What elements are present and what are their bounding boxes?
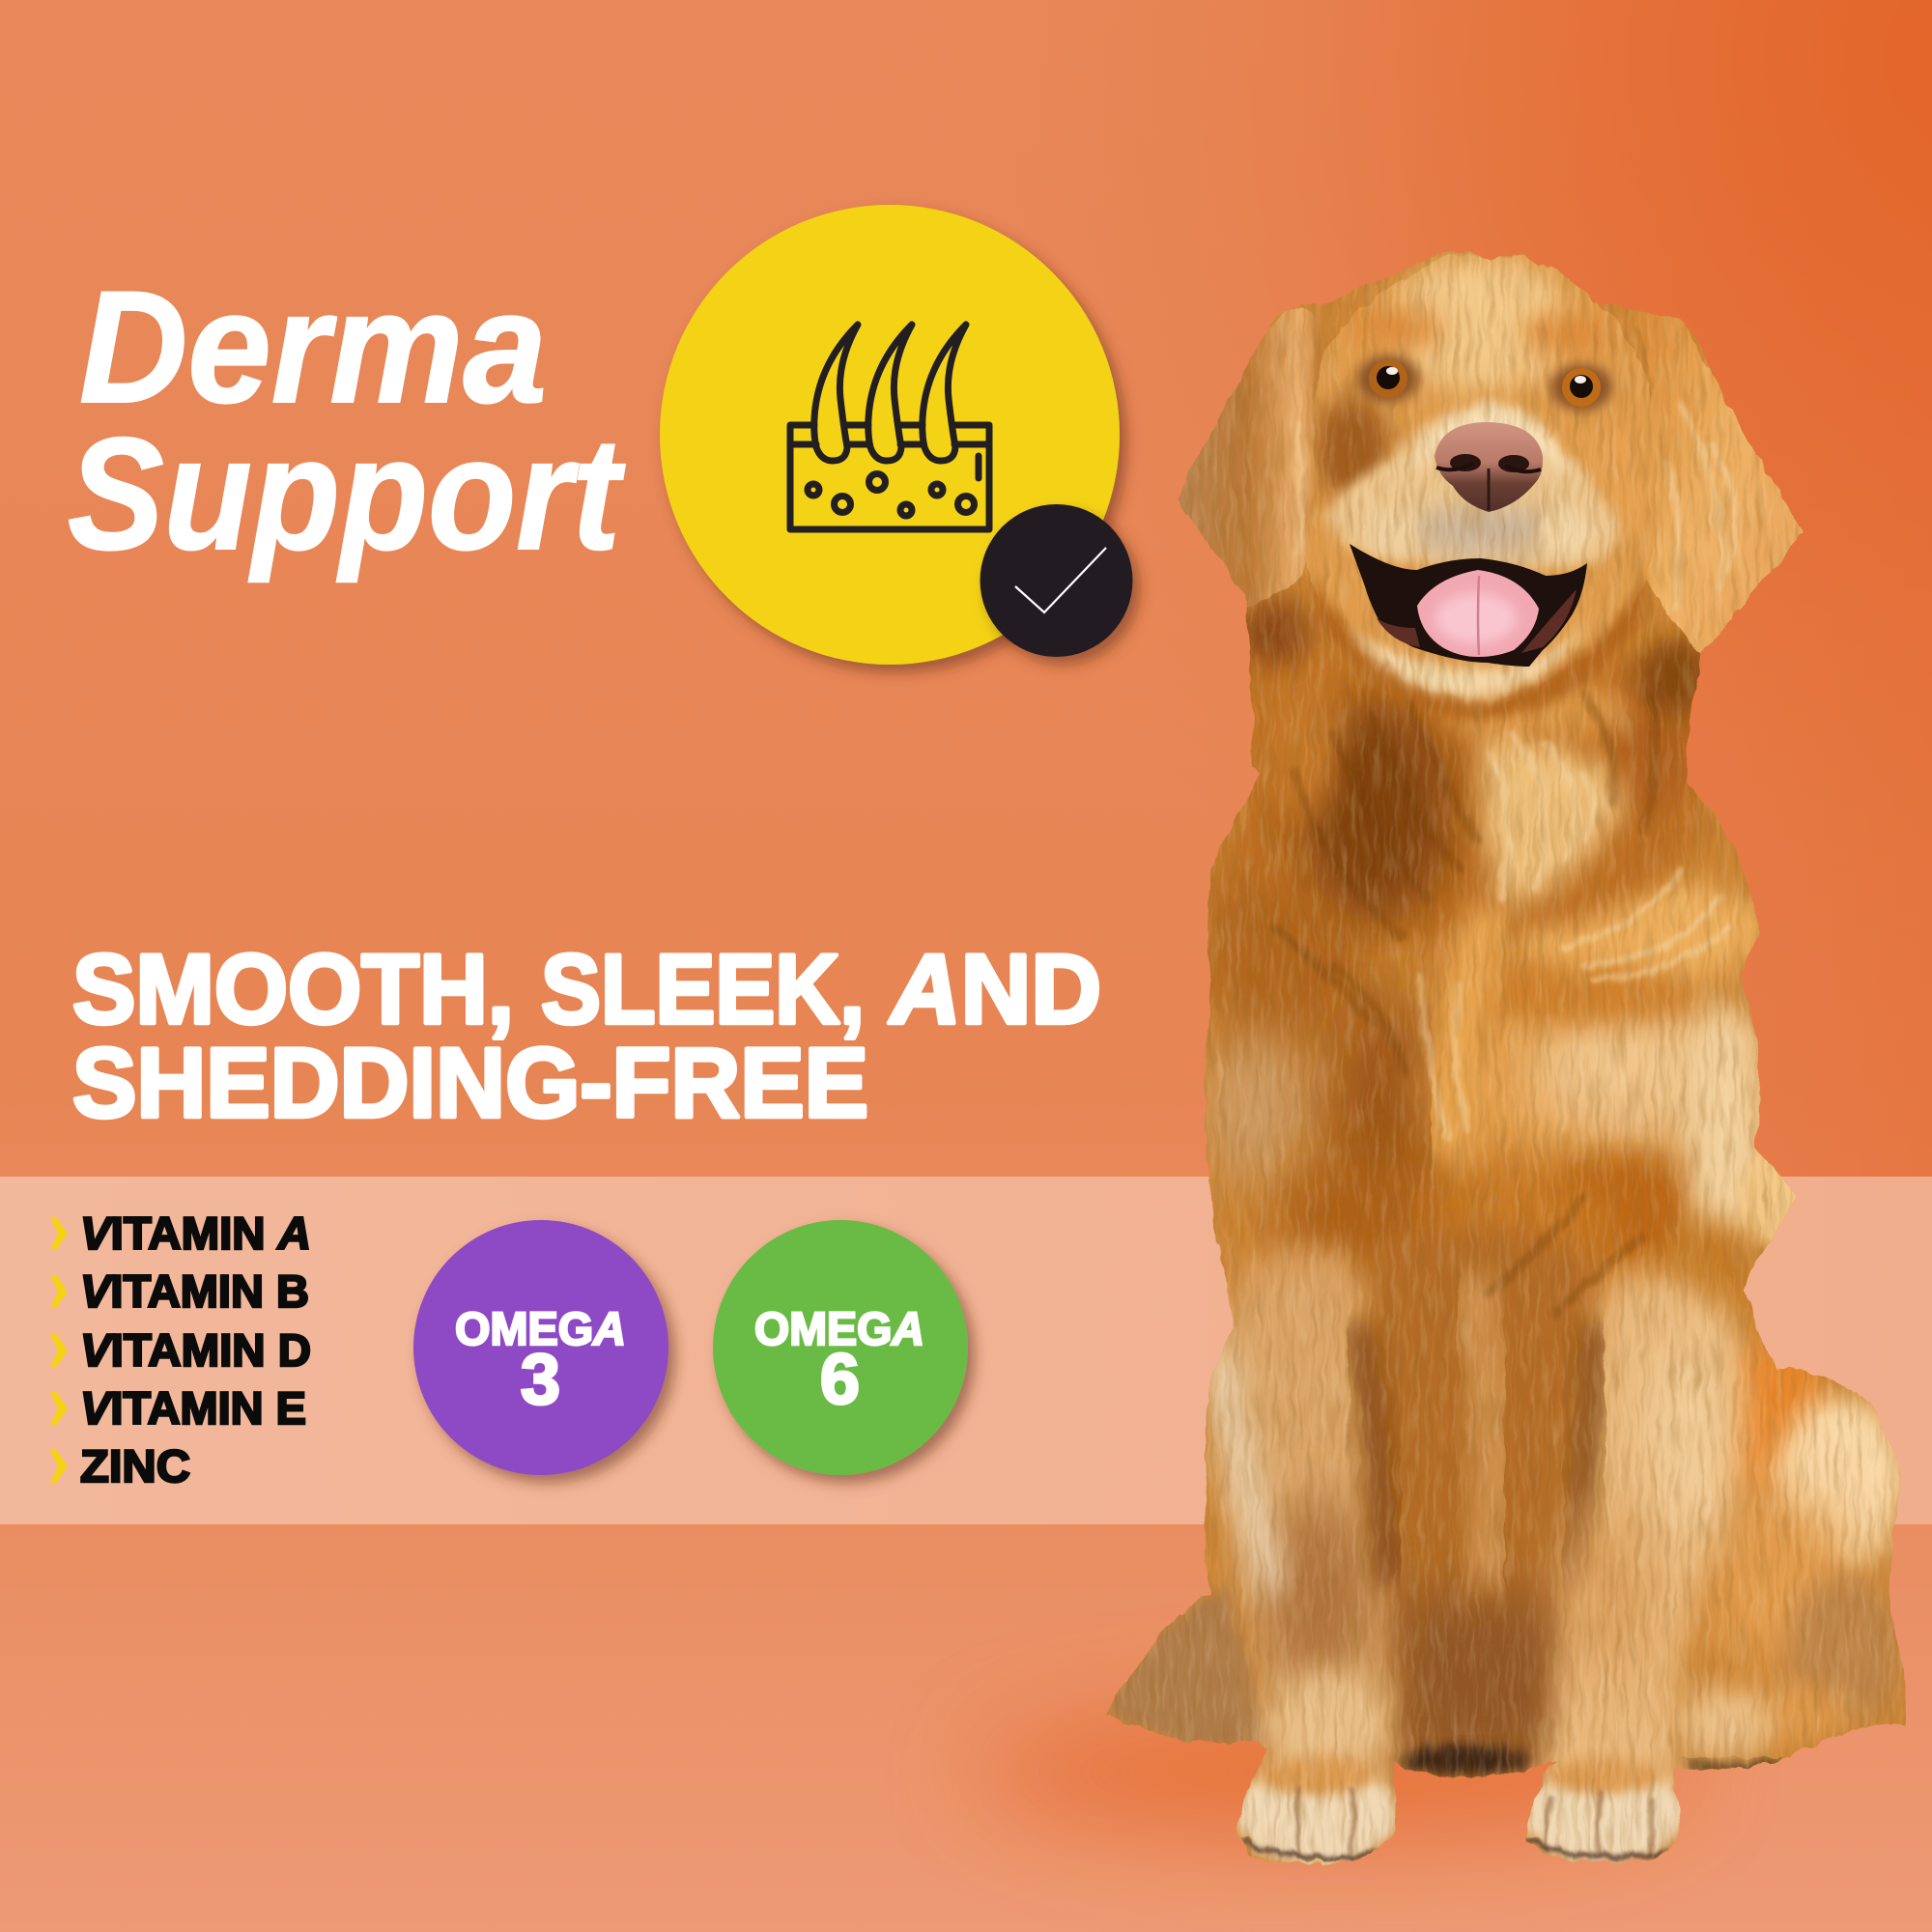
headline: smooth, sleek, and shedding-free: SHEDDING-FREE — [72, 1028, 868, 1138]
vitamin list — [50, 1208, 311, 1492]
omega 6 badge: OMEGA — [754, 1304, 924, 1355]
paws — [1235, 1756, 1685, 1866]
list labels: ZINC — [80, 1440, 190, 1492]
headline: smooth, sleek, and shedding-free — [72, 934, 1101, 1138]
left ear — [1177, 309, 1321, 609]
muzzle — [1326, 404, 1620, 569]
golden retriever illustration — [1105, 251, 1906, 1866]
dog body base — [1105, 251, 1906, 1866]
dog floor shadow — [976, 1705, 1690, 1840]
list labels: VITAMIN D — [80, 1324, 311, 1376]
list labels: VITAMIN A — [80, 1208, 311, 1259]
list labels — [80, 1208, 311, 1492]
left front leg — [1208, 1273, 1394, 1797]
left hind fur — [1106, 1584, 1275, 1748]
left eye — [1357, 355, 1419, 402]
title: Derma Support: Support — [68, 405, 625, 582]
omega 6 badge: 6 — [820, 1339, 860, 1419]
check badge — [980, 504, 1132, 657]
right ear — [1633, 311, 1804, 654]
icon: skin and hair follicles — [790, 325, 989, 529]
right front leg — [1536, 1277, 1741, 1797]
right eye — [1550, 364, 1612, 411]
omega 3 badge: 3 — [521, 1339, 560, 1419]
list labels: VITAMIN E — [80, 1382, 306, 1434]
lips — [1377, 589, 1577, 653]
headline: smooth, sleek, and shedding-free: SMOOTH, — [72, 934, 514, 1044]
list bullets — [50, 1217, 68, 1483]
fur strands — [1275, 406, 1736, 1314]
omega 6 badge — [713, 1220, 968, 1475]
belly and chest centre — [1367, 1227, 1594, 1776]
tongue — [1417, 570, 1539, 657]
body colour masses — [1198, 831, 1805, 1333]
head — [1302, 253, 1657, 720]
omega 3 badge — [413, 1220, 668, 1475]
haunch and tail — [1674, 1348, 1906, 1770]
dog fur and body — [1105, 251, 1906, 1866]
icon: check mark — [1015, 548, 1106, 612]
nose — [1435, 422, 1543, 512]
fur texture overlays — [1063, 213, 1932, 1893]
omega 3 badge: OMEGA — [455, 1304, 626, 1355]
title: Derma Support — [68, 258, 625, 582]
badge: yellow circle with skin and hair icon — [660, 205, 1120, 665]
ingredient band — [0, 1177, 1932, 1524]
neck and mane — [1236, 599, 1711, 1159]
headline: smooth, sleek, and shedding-free: AND — [888, 934, 1101, 1044]
headline: smooth, sleek, and shedding-free: SLEEK, — [541, 934, 865, 1044]
open mouth — [1350, 544, 1587, 667]
chin — [1352, 618, 1584, 699]
title: Derma Support: Derma — [79, 258, 547, 436]
list labels: VITAMIN B — [80, 1265, 309, 1317]
